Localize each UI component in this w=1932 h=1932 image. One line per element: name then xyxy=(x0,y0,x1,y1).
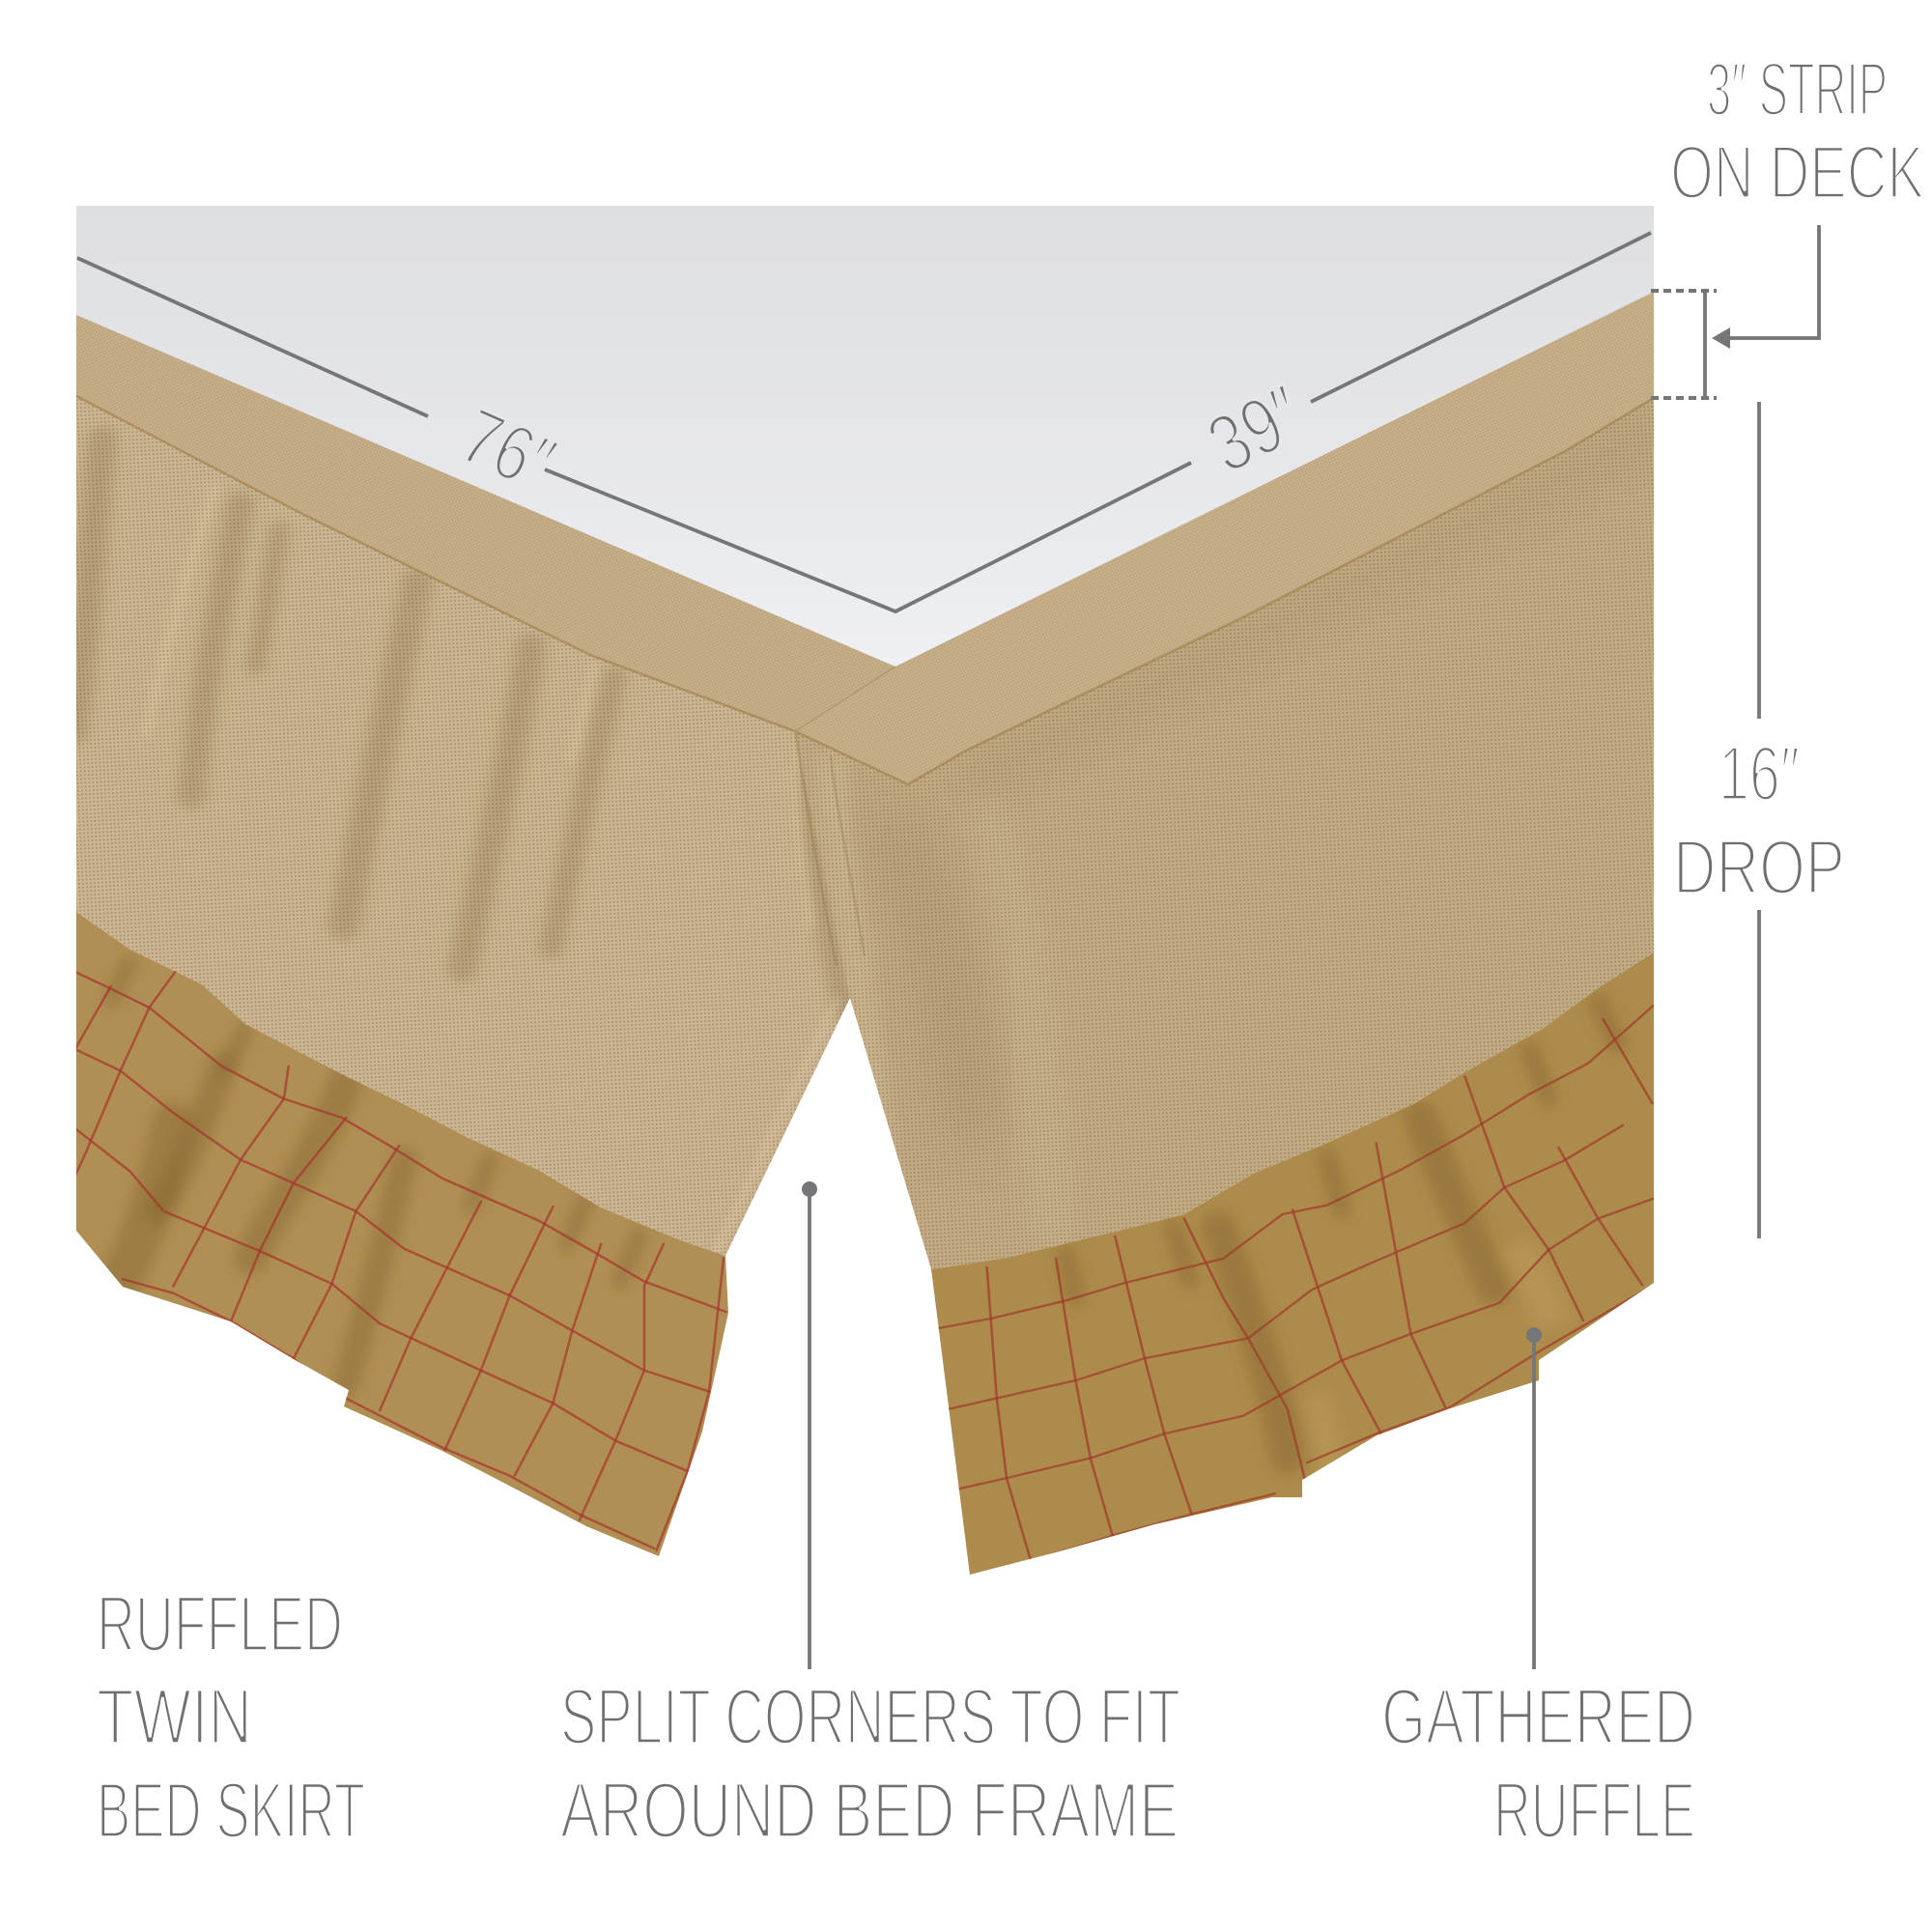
left burlap side panel xyxy=(72,396,850,1256)
title: ruffled twin bed skirt: BED SKIRT xyxy=(97,1767,365,1855)
left plaid ruffle xyxy=(76,912,728,1556)
callout: gathered ruffle pointer xyxy=(1526,1327,1542,1669)
photo: bed skirt product xyxy=(72,206,1654,1575)
label: split corners to fit around bed frame: SPLIT CORNERS TO FIT xyxy=(560,1673,1180,1761)
dimension: 76 inch length xyxy=(77,258,1191,611)
stitched seams xyxy=(76,396,1654,784)
label: 16 inch drop: DROP xyxy=(1673,824,1845,910)
title: ruffled twin bed skirt: RUFFLED xyxy=(97,1580,343,1668)
right burlap side panel xyxy=(795,398,1654,1269)
fold pleat at split corner xyxy=(796,734,865,966)
dimension: 39 inch width: 39″ xyxy=(1194,367,1318,491)
arrow: strip label to bracket xyxy=(1712,225,1819,349)
dimension: 39 inch width xyxy=(1194,233,1651,491)
left deck strip xyxy=(76,315,895,731)
dimension: 76 inch length: 76″ xyxy=(448,392,567,509)
title: ruffled twin bed skirt xyxy=(97,1580,365,1855)
label: gathered ruffle: RUFFLE xyxy=(1493,1767,1695,1855)
callout: split corners pointer xyxy=(802,1181,817,1669)
right plaid ruffle xyxy=(931,952,1654,1575)
white mattress deck sheet xyxy=(76,206,1654,667)
bracket: strip measurement with dashed ends xyxy=(1651,291,1717,398)
title: ruffled twin bed skirt: TWIN xyxy=(97,1673,252,1761)
label: gathered ruffle xyxy=(1381,1673,1695,1855)
right deck strip xyxy=(795,292,1654,784)
label: 16 inch drop: 16″ xyxy=(1719,730,1800,816)
dimension: 16 inch drop line xyxy=(1757,402,1761,1238)
label: gathered ruffle: GATHERED xyxy=(1381,1673,1695,1761)
label: 3 inch strip on deck xyxy=(1670,46,1924,214)
label: split corners to fit around bed frame xyxy=(560,1673,1180,1855)
label: 16 inch drop xyxy=(1673,730,1845,910)
label: split corners to fit around bed frame: AROUND BED FRAME xyxy=(560,1767,1179,1855)
